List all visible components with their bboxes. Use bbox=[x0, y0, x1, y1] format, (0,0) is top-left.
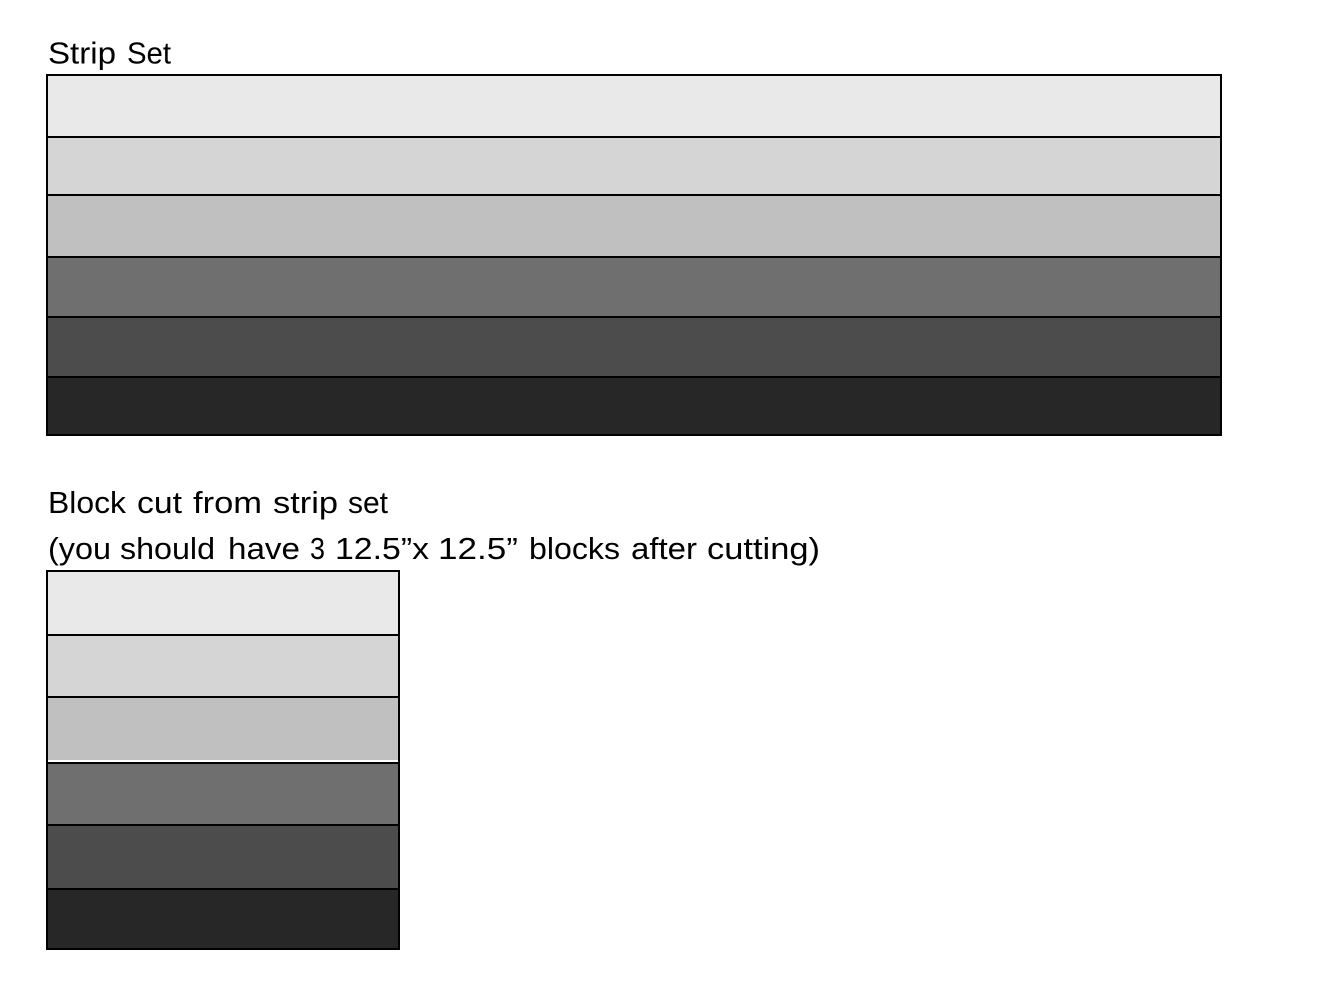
text: block cutting note: (you bbox=[48, 531, 111, 566]
text: block cutting note: have bbox=[228, 531, 300, 566]
strip 3: mid-light grey bbox=[46, 194, 1222, 258]
block strip 6: darkest bbox=[46, 888, 400, 950]
text: block cutting note: after bbox=[631, 531, 697, 566]
heading: strip set bbox=[48, 36, 171, 70]
text: block cutting note: should bbox=[120, 531, 215, 566]
text: block cutting note: 3 bbox=[310, 531, 325, 566]
strip 5: dark grey bbox=[46, 316, 1222, 378]
text: block cutting note: 12.5”x bbox=[335, 531, 430, 566]
block strip 2: light grey bbox=[46, 634, 400, 698]
panel: strip set diagram bbox=[46, 74, 1222, 436]
heading: block cut from strip set: from bbox=[193, 485, 262, 520]
strip 4: mid-dark grey bbox=[46, 256, 1222, 318]
heading: block cut from strip set: Block bbox=[48, 485, 127, 520]
block strip 5: dark grey bbox=[46, 824, 400, 890]
block strip 1: lightest bbox=[46, 570, 400, 636]
text: block cutting note bbox=[48, 531, 820, 566]
heading: block cut from strip set bbox=[48, 485, 388, 520]
panel: cut block diagram bbox=[46, 570, 400, 950]
strip 2: light grey bbox=[46, 136, 1222, 196]
block strip 4: mid-dark grey bbox=[46, 762, 400, 826]
heading: strip set: Strip bbox=[48, 36, 116, 70]
heading: strip set: Set bbox=[127, 36, 171, 70]
strip 6: darkest bbox=[46, 376, 1222, 436]
text: block cutting note: 12.5” bbox=[438, 531, 518, 566]
heading: block cut from strip set: cut bbox=[137, 485, 182, 520]
text: block cutting note: cutting) bbox=[707, 531, 820, 566]
strip 1: lightest bbox=[46, 74, 1222, 138]
heading: block cut from strip set: set bbox=[348, 485, 388, 520]
text: block cutting note: blocks bbox=[529, 531, 620, 566]
block strip 3: mid-light grey bbox=[46, 696, 400, 760]
heading: block cut from strip set: strip bbox=[273, 485, 338, 520]
